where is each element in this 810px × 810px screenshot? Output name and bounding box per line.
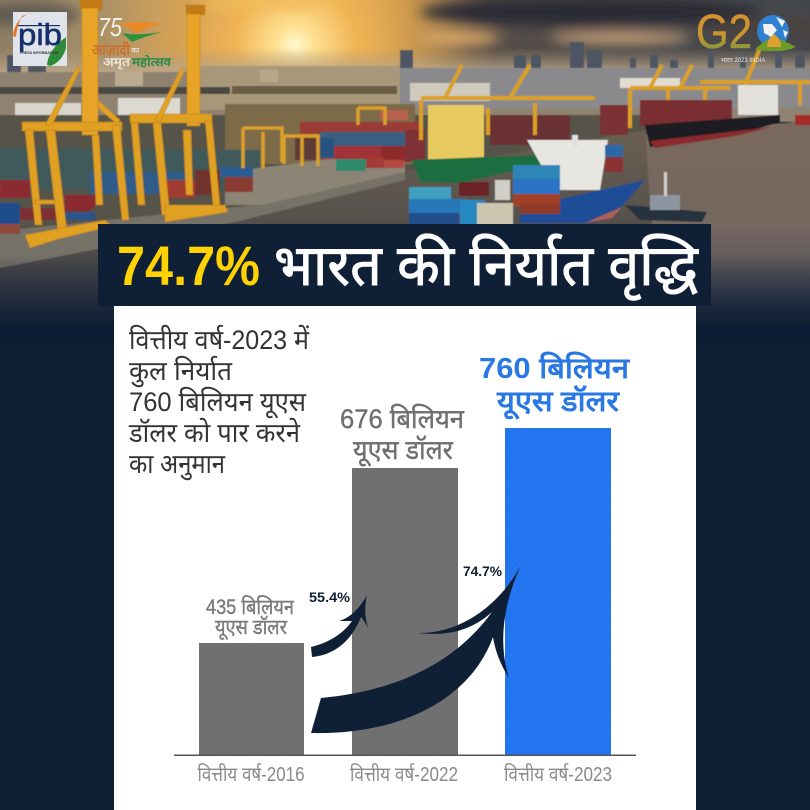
value label: 435 <box>206 595 294 640</box>
logo: 75 Azadi ka Amrit Mahotsav: 75 <box>98 12 122 42</box>
arrow: 2016 to 2023 <box>311 565 521 733</box>
photo: container port at sunset <box>0 0 810 342</box>
bar: FY2023 <box>505 428 611 755</box>
title banner: भारत की निर्यात वृद्धि <box>274 233 699 301</box>
containers, left <box>0 167 253 234</box>
pier <box>0 168 405 270</box>
logo: 75 Azadi ka Amrit Mahotsav: अमृत <box>103 55 131 70</box>
water left and centre <box>0 130 660 335</box>
axis labels: वित्तीय वर्ष-2022 <box>350 763 458 786</box>
text block: estimate description: कुल निर्यात <box>129 355 233 388</box>
logo: 75 Azadi ka Amrit Mahotsav <box>92 12 172 70</box>
gradient fade into navy <box>0 255 810 325</box>
logo: 75 Azadi ka Amrit Mahotsav: महोत्सव <box>131 55 172 69</box>
back containers centre <box>405 105 628 160</box>
value label: 435: यूएस डॉलर <box>215 615 287 640</box>
text block: estimate description <box>128 324 310 481</box>
tugboat <box>625 172 707 222</box>
title banner <box>98 224 711 306</box>
value label: 435: 435 बिलियन <box>206 595 294 619</box>
water right <box>600 120 810 335</box>
text block: estimate description: डॉलर को पार करने <box>128 417 301 448</box>
axis labels: वित्तीय वर्ष-2016 <box>198 763 304 786</box>
logo: PIB: PRESS INFORMATION <box>20 51 59 55</box>
bar: FY2016 <box>199 643 304 755</box>
value label: 760 <box>479 351 630 420</box>
logo: 75 Azadi ka Amrit Mahotsav: का <box>131 46 140 55</box>
value label: 676: 676 बिलियन <box>340 403 465 434</box>
ship: red hull far <box>645 115 780 147</box>
logo: G20: G2 <box>696 6 752 59</box>
crane 2 <box>130 5 228 222</box>
logo: PIB <box>13 12 67 66</box>
text block: estimate description: वित्तीय वर्ष-2023 में <box>129 324 310 355</box>
growth label: 55.4%: 55.4% <box>309 589 351 605</box>
title banner: 74.7% <box>117 234 260 297</box>
skyline <box>7 42 805 80</box>
containers, middle yard <box>295 110 420 171</box>
port yard <box>0 115 660 235</box>
value label: 760: 760 बिलियन <box>479 351 630 385</box>
axis labels <box>198 763 612 786</box>
axis labels: वित्तीय वर्ष-2023 <box>504 763 612 786</box>
arrow: 2016 to 2022 <box>311 595 369 657</box>
city band <box>0 72 810 122</box>
value label: 676 <box>340 403 465 467</box>
bar chart <box>174 351 636 786</box>
growth label: 74.7%: 74.7% <box>463 563 503 579</box>
ship: green with yellow deck house <box>428 105 484 160</box>
logo: G20 <box>696 6 796 64</box>
white chart panel <box>114 306 696 810</box>
yard cranes, middle <box>243 108 385 168</box>
ship: white superstructure <box>527 140 608 190</box>
containers, foreground stack <box>409 165 560 225</box>
crane 1 <box>22 0 129 248</box>
bar: FY2022 <box>352 468 458 755</box>
text block: estimate description: 760 बिलियन यूएस <box>129 386 307 419</box>
ship: blue hull <box>520 180 645 223</box>
value label: 760: यूएस डॉलर <box>496 385 620 420</box>
value label: 676: यूएस डॉलर <box>353 435 454 467</box>
logo: G20: भारत 2023 INDIA <box>721 58 765 64</box>
logo: PIB: pib <box>18 17 62 52</box>
logo: 75 Azadi ka Amrit Mahotsav: आज़ादी <box>92 41 131 59</box>
text block: estimate description: का अनुमान <box>129 449 226 481</box>
yellow cranes behind ships <box>421 48 810 140</box>
